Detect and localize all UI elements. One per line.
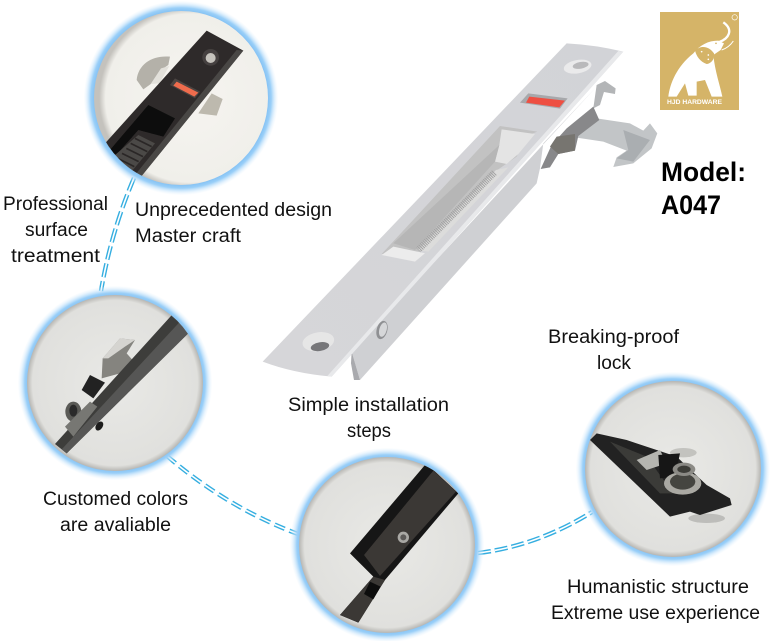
text: unprecedented design: Unprecedented design — [135, 200, 332, 221]
text: humanistic structure — [551, 577, 760, 624]
text: professional surface treatment: treatment — [11, 246, 101, 267]
heading: model number — [661, 157, 746, 220]
lock hook and mechanism — [541, 81, 657, 169]
top screw hole — [563, 58, 593, 76]
text: simple installation: Simple installation — [288, 395, 449, 416]
lock faceplate — [263, 43, 623, 377]
panel: left circle, black lock side view — [18, 286, 212, 480]
text: breaking-proof lock: Breaking-proof — [548, 327, 680, 348]
text: unprecedented design: Master craft — [135, 226, 242, 247]
text: humanistic structure: Extreme use experience — [551, 603, 760, 624]
text: customed colors: are avaliable — [60, 515, 171, 536]
text: professional surface treatment: surface — [25, 220, 88, 241]
bottom screw hole — [301, 330, 336, 354]
lock side skirt — [352, 87, 597, 380]
text: customed colors: Customed colors — [43, 489, 188, 510]
text: unprecedented design — [135, 200, 332, 247]
text: humanistic structure: Humanistic structure — [567, 577, 749, 598]
text: simple installation — [288, 395, 449, 442]
text: customed colors — [43, 489, 188, 536]
logo: HJD Hardware elephant badge — [660, 12, 739, 110]
text: professional surface treatment — [3, 194, 108, 267]
connector: dashed link from left circle to bottom circle — [167, 456, 298, 534]
connector: dashed link from top circle to left circle — [101, 178, 134, 291]
text: breaking-proof lock: lock — [597, 353, 631, 374]
red indicator window — [520, 93, 568, 109]
side rivet — [374, 320, 390, 340]
panel: bottom circle, black lock end with rivet — [290, 448, 484, 641]
panel: right circle, lock mechanism back view — [576, 372, 770, 566]
text: professional surface treatment: Professional — [3, 194, 108, 215]
text: breaking-proof lock — [548, 327, 680, 374]
logo wordmark: HJD HARDWARE — [667, 100, 722, 106]
connector: dashed link from bottom circle to right circle — [478, 512, 592, 553]
main product: silver sliding door lock — [263, 43, 657, 380]
heading: model number: Model: — [661, 157, 746, 187]
icon: elephant — [668, 15, 737, 97]
panel: top circle, black lock face close-up — [84, 1, 278, 195]
heading: model number: A047 — [661, 190, 721, 220]
text: simple installation: steps — [347, 421, 391, 442]
finger recess with serrated strip — [382, 126, 537, 262]
